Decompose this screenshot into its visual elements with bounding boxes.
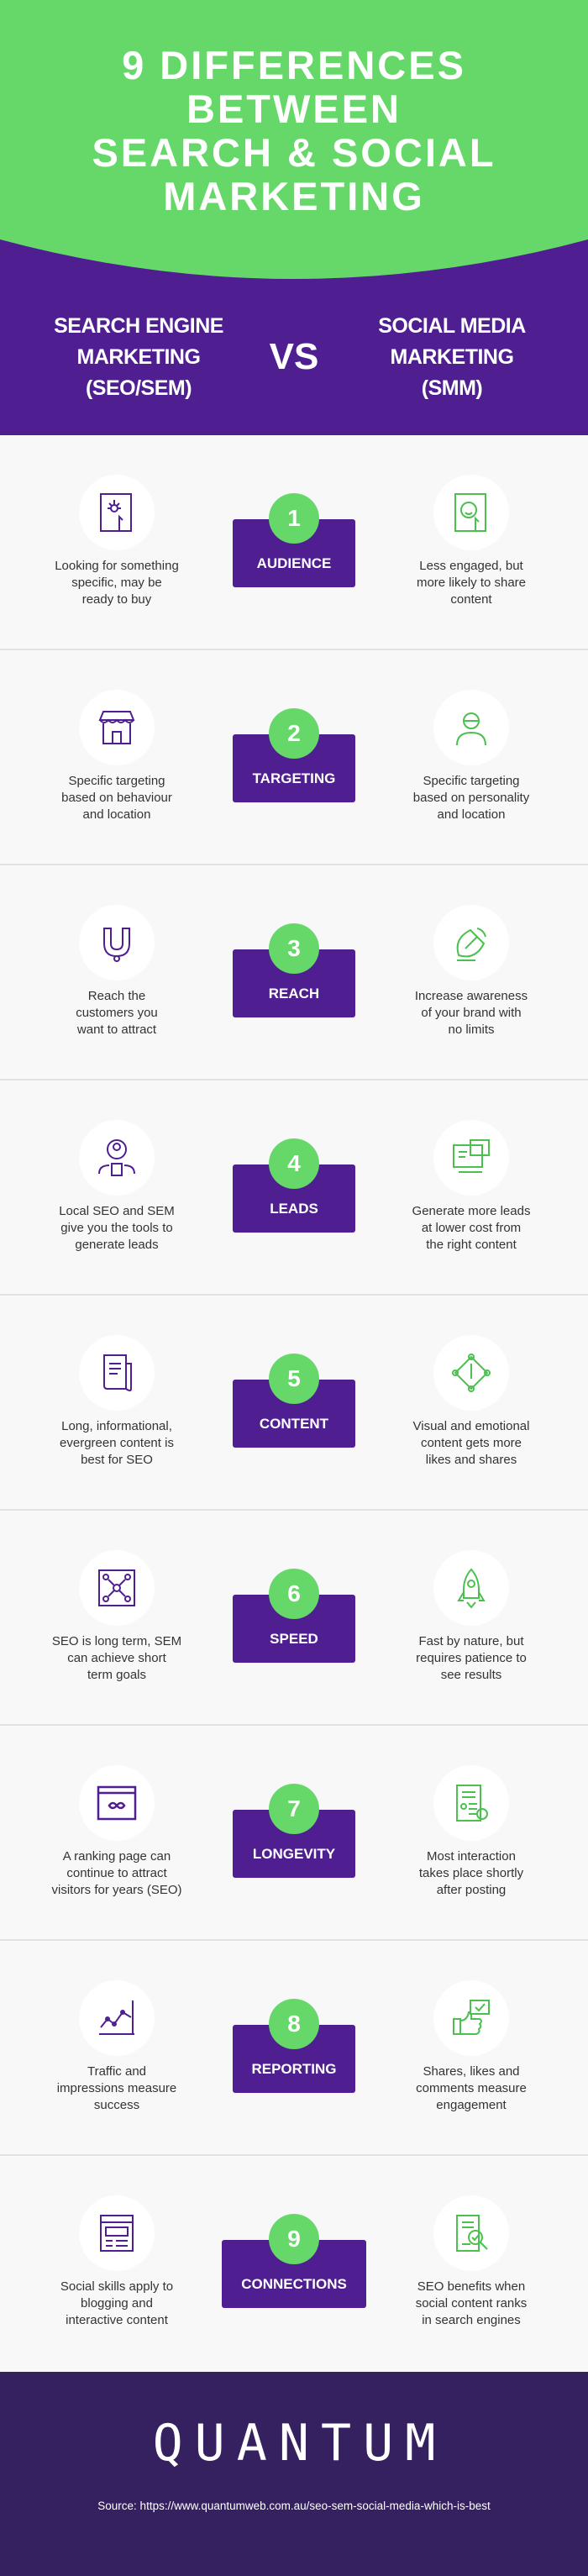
text right: Increase awareness [415,989,528,1003]
text right: likes and shares [426,1453,517,1467]
text right [419,1849,524,1897]
heading: social media marketing: MARKETING [391,345,513,369]
text right [416,2279,527,2327]
text left [55,559,179,607]
text left [76,989,158,1037]
text left: Looking for something [55,559,179,573]
label: LEADS [270,1201,318,1217]
logo: quantum: QUANTUM [153,2414,447,2473]
number [269,923,319,974]
heading: search engine marketing: MARKETING [77,345,200,369]
text right [415,989,528,1037]
icon right [433,690,509,765]
number [269,1354,319,1404]
text left: and location [83,807,150,822]
number [269,1569,319,1619]
text right [416,2064,527,2112]
number: 7 [287,1795,301,1822]
text left: best for SEO [81,1453,153,1467]
title: SEARCH & SOCIAL [92,130,496,175]
row 6: speed [0,1511,588,1726]
number: 1 [287,505,301,531]
text left: SEO is long term, SEM [52,1634,181,1648]
text left: Specific targeting [68,774,165,788]
number: 2 [287,720,301,746]
label: AUDIENCE [257,555,331,571]
text left: blogging and [81,2296,153,2311]
header background [0,0,588,435]
text left: visitors for years (SEO) [51,1883,182,1897]
label: TARGETING [253,770,335,786]
text right: content [450,592,492,607]
label [233,519,355,587]
text right: requires patience to [416,1651,527,1665]
row 2: targeting [0,650,588,865]
text left: impressions measure [57,2081,176,2095]
label [222,2240,366,2308]
row 5: content [0,1296,588,1511]
label: REACH [269,986,319,1001]
number: 5 [287,1365,301,1391]
heading: search engine marketing [54,314,223,400]
number [269,2214,319,2264]
text right: of your brand with [421,1006,522,1020]
text left: Social skills apply to [60,2279,173,2294]
title [92,43,496,218]
text left: Local SEO and SEM [59,1204,175,1218]
number [269,1138,319,1189]
text right: see results [441,1668,501,1682]
icon right [433,2195,509,2271]
icon left [79,1765,155,1841]
number: 8 [287,2011,301,2037]
text right: after posting [437,1883,506,1897]
text right: Fast by nature, but [418,1634,524,1648]
label [233,1164,355,1233]
text right: at lower cost from [422,1221,521,1235]
text right: takes place shortly [419,1866,523,1880]
text right: based on personality [413,791,529,805]
text left [57,2064,176,2112]
number [269,708,319,759]
row 7: longevity [0,1726,588,1941]
text left: evergreen content is [60,1436,174,1450]
label [233,734,355,802]
text right [413,1419,529,1467]
text right: comments measure [416,2081,527,2095]
heading: social media marketing: (SMM) [422,376,482,400]
heading: social media marketing [378,314,526,400]
number: 4 [287,1150,301,1176]
text left: continue to attract [66,1866,167,1880]
label: SPEED [270,1631,318,1647]
text right [413,774,529,822]
text left: ready to buy [82,592,151,607]
source: Source: https://www.quantumweb.com.au/seo-sem-social-media-which-is-best [97,2500,491,2512]
icon right [433,1765,509,1841]
text left [60,2279,173,2327]
text left: give you the tools to [60,1221,173,1235]
text left: A ranking page can [63,1849,171,1864]
text left: based on behaviour [61,791,172,805]
heading: social media marketing: SOCIAL MEDIA [378,314,526,338]
text left: can achieve short [67,1651,166,1665]
text right: no limits [448,1023,494,1037]
label [233,1595,355,1663]
text left [59,1204,175,1252]
text right: Generate more leads [412,1204,530,1218]
row 1: audience [0,435,588,650]
icon left [79,1980,155,2056]
icon right [433,1335,509,1411]
label: REPORTING [251,2061,337,2077]
heading: search engine marketing: SEARCH ENGINE [54,314,223,338]
footer [0,2372,588,2576]
text right [416,1634,527,1682]
text left [52,1634,181,1682]
text right: Visual and emotional [413,1419,529,1433]
row 3: reach [0,865,588,1080]
text right: content gets more [421,1436,522,1450]
text left [60,1419,174,1467]
icon right [433,905,509,980]
row 9: connections [60,2214,527,2327]
text left: Long, informational, [61,1419,172,1433]
number: 3 [287,935,301,961]
text right: SEO benefits when [417,2279,525,2294]
text right: engagement [436,2098,507,2112]
number: 6 [287,1580,301,1606]
text right: social content ranks [416,2296,527,2311]
icon left [79,1120,155,1196]
label [233,1810,355,1878]
vs: VS [270,336,318,377]
label: CONNECTIONS [241,2276,347,2292]
text right: the right content [426,1238,517,1252]
text left: generate leads [75,1238,159,1252]
title: MARKETING [163,174,425,218]
icon right [433,1550,509,1626]
icon left [79,690,155,765]
label [233,949,355,1017]
number [269,1999,319,2049]
text left [61,774,172,822]
text right: Specific targeting [423,774,520,788]
number [269,493,319,544]
icon right [433,475,509,550]
heading: search engine marketing: (SEO/SEM) [86,376,192,400]
title: 9 DIFFERENCES [122,43,466,87]
icon right [433,1980,509,2056]
icon left [79,2195,155,2271]
text right: Shares, likes and [423,2064,520,2079]
text right: Less engaged, but [419,559,523,573]
number [269,1784,319,1834]
label [233,2025,355,2093]
label [233,1380,355,1448]
icon left [79,475,155,550]
row 8: reporting [0,1941,588,2156]
icon left [79,905,155,980]
text right: in search engines [422,2313,521,2327]
text left: Traffic and [87,2064,146,2079]
label: CONTENT [260,1416,328,1432]
text left: customers you [76,1006,158,1020]
text left: success [94,2098,139,2112]
label: LONGEVITY [253,1846,335,1862]
text left [51,1849,182,1897]
row 4: leads [0,1080,588,1296]
icon left [79,1550,155,1626]
text left: Reach the [88,989,145,1003]
text left: want to attract [77,1023,156,1037]
text right: more likely to share [417,576,526,590]
text right: and location [438,807,505,822]
text left: term goals [87,1668,146,1682]
text left: specific, may be [71,576,162,590]
text right: Most interaction [427,1849,516,1864]
text right [412,1204,530,1252]
title: BETWEEN [186,87,402,131]
number: 9 [287,2226,301,2252]
text left: interactive content [66,2313,168,2327]
icon left [79,1335,155,1411]
icon right [433,1120,509,1196]
text right [417,559,526,607]
